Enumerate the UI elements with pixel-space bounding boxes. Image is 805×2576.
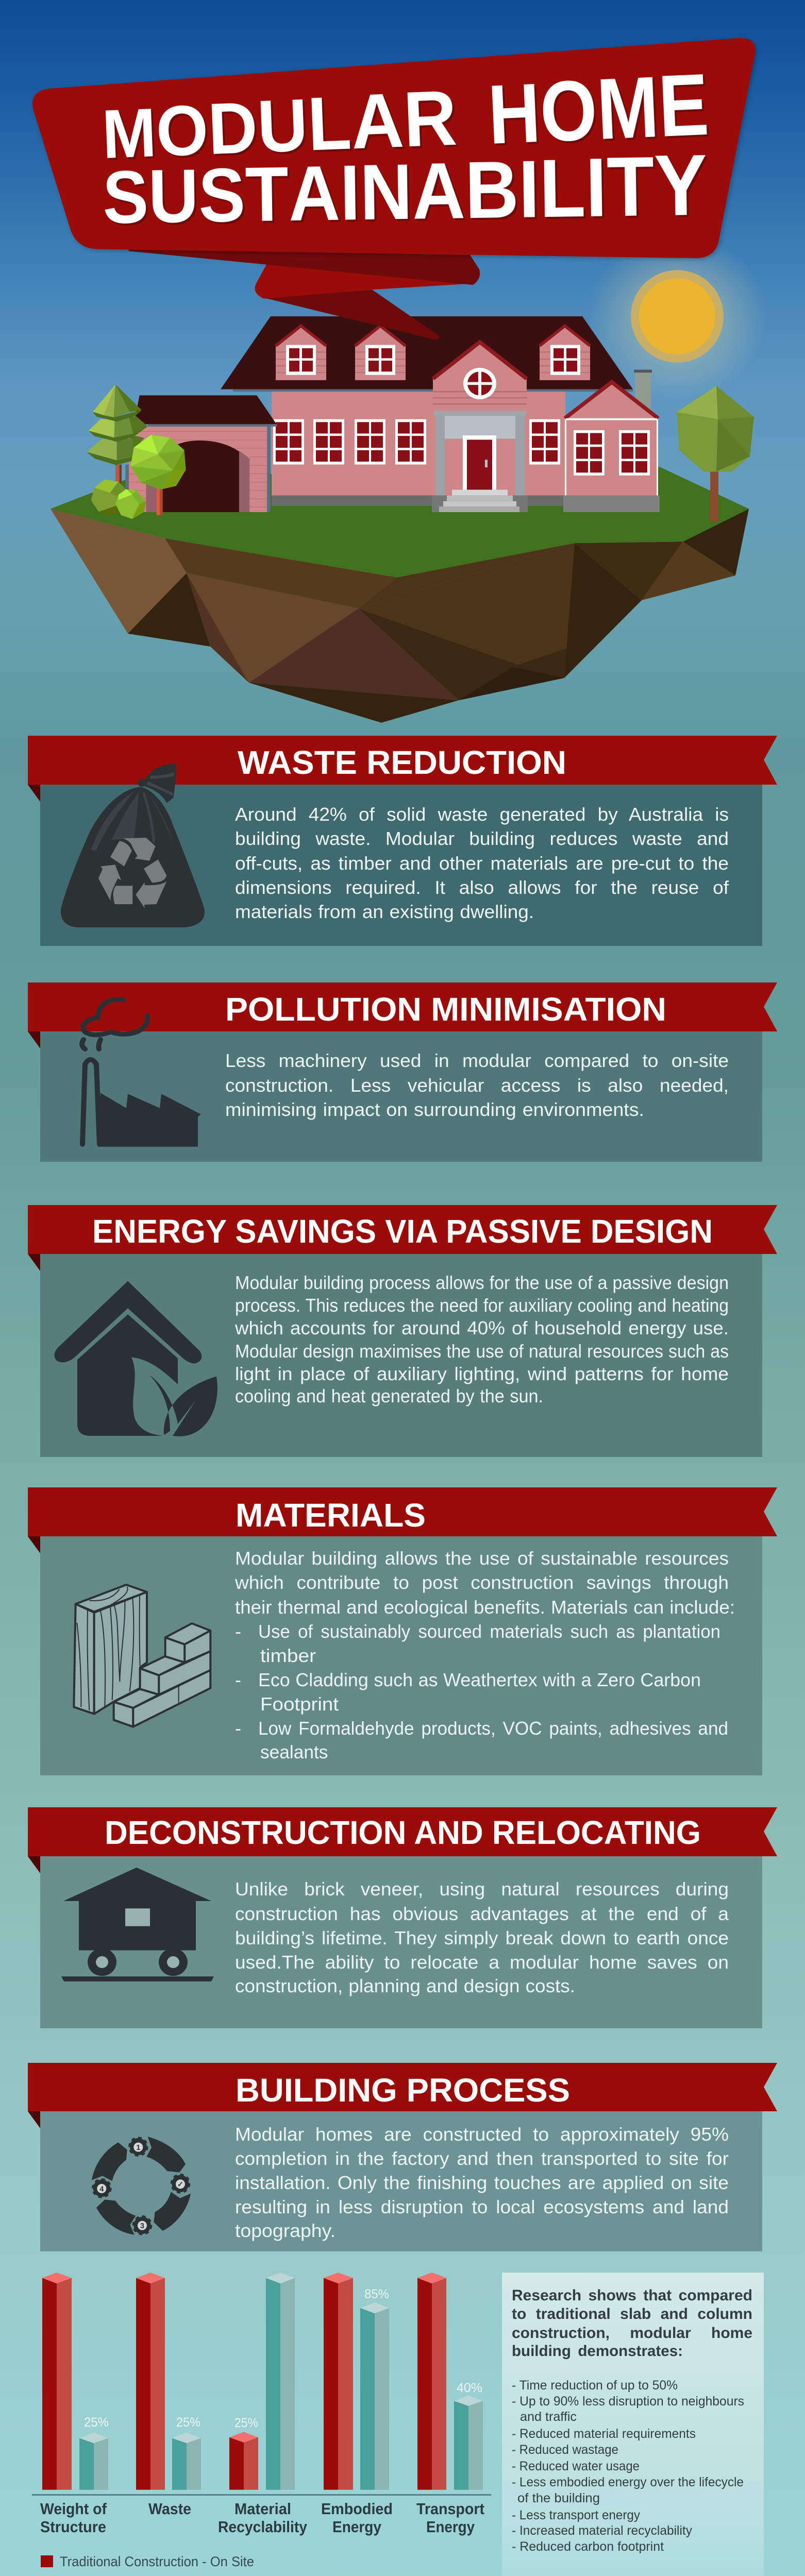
percentage labels: 25% [176,2415,200,2430]
panel: deconstruction and relocating [28,1807,777,2028]
conifer tree [87,384,148,483]
research heading: building demonstrates: [512,2343,683,2360]
icon: process cycle with gears: 4 [99,2185,104,2193]
axis [32,2494,491,2496]
text block: building process [235,2124,729,2241]
category labels: Energy [426,2518,475,2536]
panel: waste reduction [28,736,777,946]
text block: energy savings: light in place of auxiliary lighting, wind patterns for home [235,1363,729,1384]
heading: waste reduction: WASTE REDUCTION [238,744,566,781]
title: MODULAR [100,74,458,175]
icon: timber and bricks [74,1585,210,1727]
text block: deconstruction: building’s lifetime. They simply break down to earth once [235,1927,729,1948]
panel background [40,785,762,946]
title: HOME [486,55,711,163]
text block: building process: completion in the factory and then transported to site for [235,2148,729,2169]
icon: process cycle with gears: ✓ [177,2181,183,2189]
text block: waste reduction: materials from an existing dwelling. [235,901,534,922]
panel background [40,1254,762,1457]
title banner [32,38,756,258]
panel: energy savings via passive design [28,1205,777,1457]
research heading [512,2287,752,2360]
text block: materials: sealants [260,1741,328,1762]
percentage labels: 40% [457,2381,482,2395]
text block: pollution minimisation: construction. Less vehicular access is also needed, [225,1075,729,1095]
text block: materials: - [235,1718,241,1739]
right tree [677,386,754,522]
research list: - Time reduction of up to 50% [512,2378,678,2393]
research heading: to traditional slab and column [512,2306,752,2323]
ribbon: materials [28,1487,777,1553]
category labels: Embodied [321,2500,393,2518]
research list: - Increased material recyclability [512,2523,692,2538]
garage and left trees [87,384,277,519]
text block: materials: Use of sustainably sourced materials such as plantation [258,1621,720,1642]
icon: house with leaf [54,1281,217,1436]
panel background [40,1856,762,2028]
percentage labels: 25% [84,2415,109,2430]
text block: energy savings: process. This reduces the need for auxiliary cooling and heating [235,1295,729,1316]
text block: pollution minimisation [225,1050,729,1120]
category labels [40,2500,484,2536]
banner tail folds [129,249,480,340]
icon: house on wheels [61,1868,214,1981]
text block: materials: Eco Cladding such as Weathertex with a Zero Carbon [258,1669,701,1690]
panel: materials [28,1487,777,1775]
garage [125,395,277,512]
round tree [130,435,186,515]
text block: building process: topography. [235,2220,336,2241]
text block: waste reduction: Around 42% of solid waste generated by Australia is [235,804,729,825]
ribbon: deconstruction [28,1807,777,1873]
text block: deconstruction: Unlike brick veneer, using natural resources during [235,1878,729,1900]
text block: deconstruction: construction has obvious advantages at the end of a [235,1903,729,1924]
research list: - Reduced wastage [512,2443,618,2457]
text block: materials: Modular building allows the use of sustainable resources [235,1548,729,1569]
text block: energy savings [235,1272,729,1406]
panel: building process [28,2063,777,2251]
text block: building process: resulting in less disruption to local ecosystems and land [235,2196,729,2217]
text block: materials: which contribute to post construction savings through [235,1572,729,1593]
ribbon: energy savings [28,1205,777,1271]
house [221,316,660,512]
icon: sun [587,233,767,400]
text block: pollution minimisation: Less machinery used in modular compared to on-site [225,1050,729,1071]
research list: - Up to 90% less disruption to neighbours [512,2394,744,2409]
percentage labels: 85% [364,2287,389,2301]
heading: deconstruction: DECONSTRUCTION AND RELOCATING [105,1814,701,1851]
text block: materials [235,1548,735,1762]
research list: - Less embodied energy over the lifecycle [512,2475,744,2489]
text block: energy savings: cooling and heat generated by the sun. [235,1385,543,1406]
ribbon: building process [28,2063,777,2128]
panel background [40,1031,762,1162]
percentage labels [84,2287,482,2430]
text block: deconstruction: construction, planning and design costs. [235,1975,575,1996]
legend: Traditional Construction - On Site [60,2554,254,2569]
text block: building process: installation. Only the finishing touches are applied on site [235,2172,729,2193]
category labels: Recyclability [218,2518,308,2536]
ribbon: waste reduction [28,736,777,802]
floating island rock [51,509,749,723]
category labels: Transport [416,2500,484,2518]
island grass [51,467,749,578]
text block: materials: Low Formaldehyde products, VOC paints, adhesives and [258,1718,728,1739]
bar chart: traditional vs modular [32,2273,491,2569]
heading: pollution minimisation: POLLUTION MINIMISATION [225,991,666,1028]
text block: waste reduction: dimensions required. It also allows for the reuse of [235,877,729,898]
title: SUSTAINABILITY [102,137,708,242]
bars [42,2273,483,2490]
panel background [40,1536,762,1775]
research heading: construction, modular home [512,2325,752,2342]
text block: waste reduction [235,804,729,922]
icon: process cycle with gears: 1 [136,2144,140,2152]
text block: materials: their thermal and ecological benefits. Materials can include: [235,1597,735,1618]
research list: - Reduced material requirements [512,2427,696,2441]
panel: pollution minimisation [28,982,777,1162]
text block: materials: timber [260,1645,316,1666]
research list: - Reduced carbon footprint [512,2539,664,2554]
category labels: Waste [148,2500,191,2518]
text block: pollution minimisation: minimising impact on surrounding environments. [225,1099,644,1120]
text block: materials: - [235,1621,241,1642]
panel: research findings [502,2273,764,2576]
category labels: Structure [40,2518,106,2536]
icon: process cycle with gears [92,2137,191,2235]
percentage labels: 25% [234,2416,258,2430]
title [100,55,711,242]
text block: energy savings: Modular building process allows for the use of a passive design [235,1272,729,1293]
category labels: Weight of [40,2500,107,2518]
heading: materials: MATERIALS [236,1497,426,1534]
text block: energy savings: Modular design maximises the use of natural resources such as [235,1341,729,1362]
category labels: Material [234,2500,291,2518]
text block: materials: Footprint [260,1693,339,1715]
text block: waste reduction: building waste. Modular building reduces waste and [235,828,729,849]
research list: - Reduced water usage [512,2459,640,2473]
research heading: Research shows that compared [512,2287,752,2304]
icon: rubbish bag with recycle symbol [61,764,205,927]
heading: building process: BUILDING PROCESS [236,2072,570,2109]
panel background [40,2111,762,2251]
heading: energy savings: ENERGY SAVINGS VIA PASSIVE DESIGN [92,1213,713,1250]
hero illustration: banner, sun, floating island and house [32,38,759,723]
legend [41,2554,254,2576]
research list: of the building [517,2491,600,2505]
icon: factory with smoke [82,999,201,1147]
research list [512,2378,744,2554]
text block: energy savings: which accounts for around 40% of household energy use. [235,1317,729,1338]
text block: waste reduction: off-cuts, as timber and other materials are pre-cut to the [235,853,729,874]
text block: materials: - [235,1669,241,1690]
research list: - Less transport energy [512,2508,640,2522]
text block: deconstruction [235,1878,729,1996]
category labels: Energy [332,2518,382,2536]
research list: and traffic [520,2410,577,2424]
text block: building process: Modular homes are constructed to approximately 95% [235,2124,729,2145]
text block: deconstruction: used.The ability to relocate a modular home saves on [235,1952,729,1973]
bushes [91,480,146,519]
ribbon: pollution minimisation [28,982,777,1048]
icon: process cycle with gears: 3 [140,2222,144,2230]
